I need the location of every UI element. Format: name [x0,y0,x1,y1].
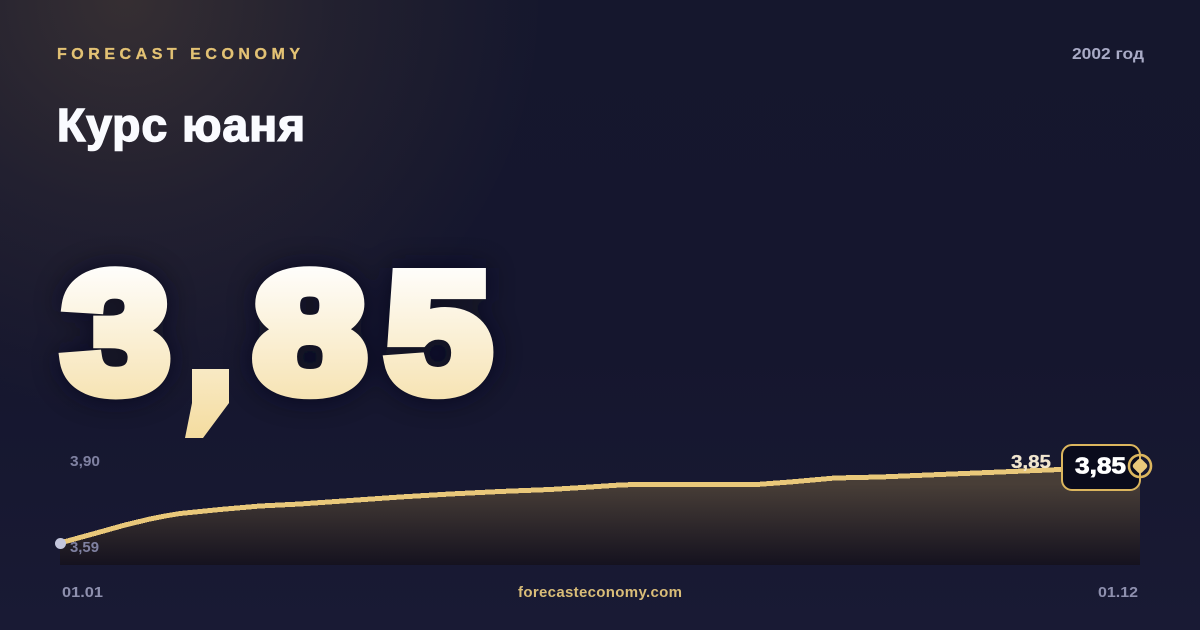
end point marker [1129,455,1151,477]
big value: 8 [254,239,366,427]
big value: 5 [386,238,491,426]
big value: 3 [63,239,169,427]
min axis label: 3,59 [70,540,99,556]
max axis label: 3,90 [70,454,100,470]
big value: 8 [254,239,366,427]
big value: 5 [386,238,491,426]
title: Курс юаня [57,99,305,151]
end value label: 3,85 [1011,452,1051,472]
trend line [60,466,1140,543]
source url: forecasteconomy.com [518,584,682,601]
start point [55,538,66,549]
comma [185,369,229,438]
year label: 2002 год [1072,46,1144,63]
value tooltip: 3,85 [1075,452,1126,478]
end date: 01.12 [1098,584,1138,601]
brand eyebrow: FORECAST ECONOMY [57,46,300,63]
line chart [55,445,1151,565]
big value [63,238,491,438]
area under line [60,466,1140,565]
value tooltip [1062,445,1140,490]
start date: 01.01 [62,584,103,601]
big value: 3 [63,239,169,427]
